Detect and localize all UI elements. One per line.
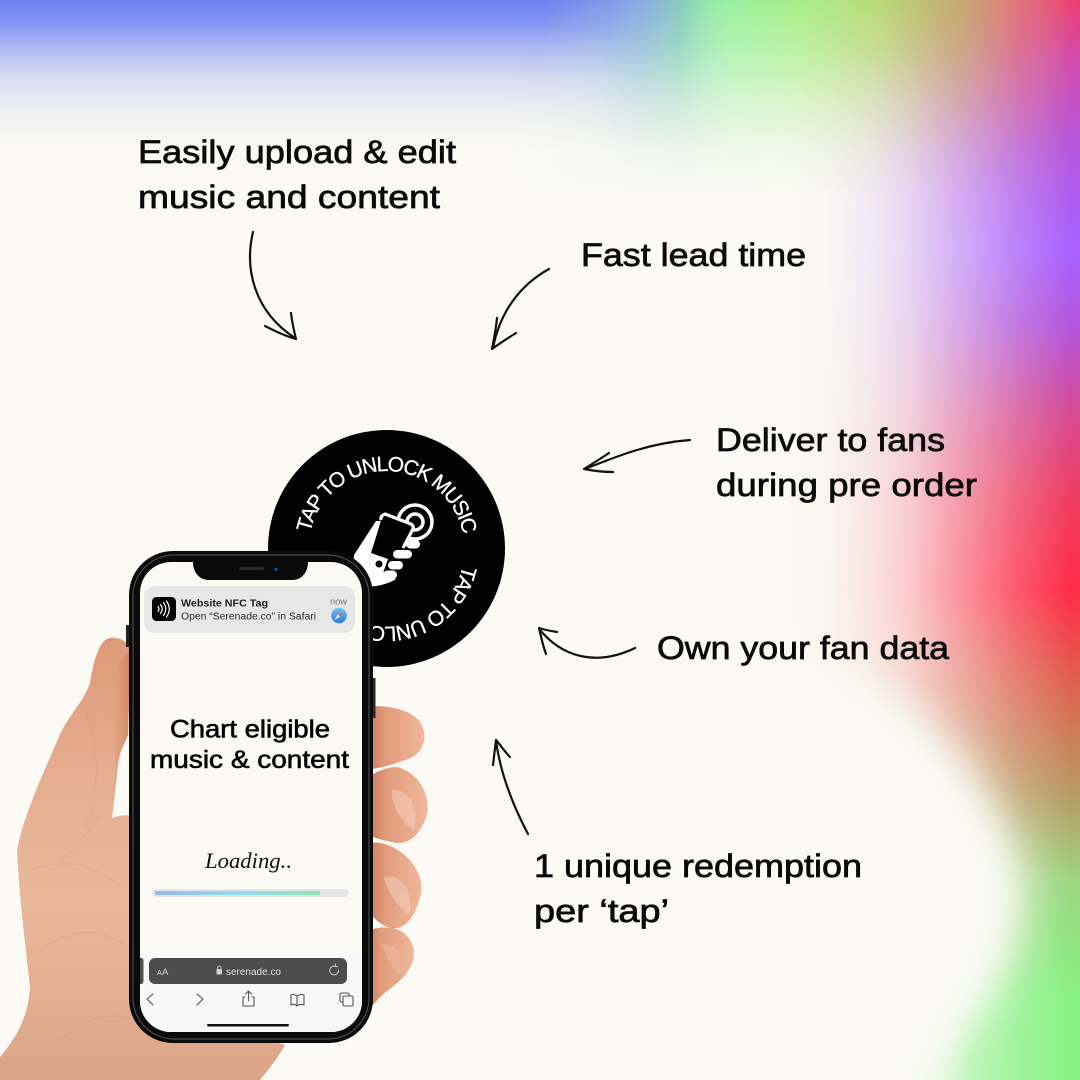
browser toolbar: [140, 952, 362, 1032]
arrow: fan data to sticker: [539, 628, 635, 658]
notification card: Open “Serenade.co” in Safari: [181, 612, 316, 622]
heading: upload and edit: [138, 134, 456, 215]
hand: palm and thumb: [0, 638, 285, 1080]
loading label: Loading..: [204, 848, 292, 873]
heading: unique redemption: 1 unique redemption: [534, 848, 862, 884]
sticker ring text: TAP TO UNLOCK MUSIC: [373, 569, 477, 642]
icon: hand tapping phone: [352, 505, 432, 586]
address pill: serenade.co: [226, 966, 281, 978]
sticker ring text: [296, 456, 477, 642]
arrow: upload to sticker: [250, 232, 296, 339]
phone: [126, 551, 376, 1043]
heading: unique redemption: per ‘tap’: [534, 893, 669, 929]
hand: index finger: [360, 706, 424, 770]
heading: fast lead time: Fast lead time: [581, 237, 806, 273]
sticker ring text: TAP TO UNLOCK MUSIC: [296, 456, 476, 534]
background gradient: right edge: [836, 0, 1080, 1080]
notification card: Website NFC Tag: [181, 598, 268, 610]
background gradient: blue top: [0, 0, 690, 121]
notification card: now: [330, 596, 348, 606]
nail: little: [382, 944, 401, 975]
address pill: AA: [157, 967, 169, 978]
arrow: lead time to sticker: [492, 269, 549, 349]
screen headline: Chart eligible: [170, 716, 330, 744]
cream wash: lower blob: [0, 620, 1023, 1080]
hand: little finger: [360, 927, 414, 1010]
NFC sticker: [268, 430, 505, 667]
phone screen: [140, 562, 362, 1032]
hand: thumb shading: [106, 650, 130, 818]
heading: upload and edit: music and content: [138, 179, 440, 215]
background gradient: green and orange top: [564, 0, 1067, 172]
toolbar icons: [147, 991, 353, 1006]
heading: own your fan data: Own your fan data: [657, 630, 949, 666]
heading: deliver to fans: during pre order: [716, 467, 977, 503]
arrow: redemption to sticker: [493, 740, 528, 834]
hand: middle finger: [360, 767, 428, 843]
icon: Safari: [331, 608, 347, 623]
notification card: [144, 586, 355, 633]
heading: deliver to fans: Deliver to fans: [716, 422, 945, 458]
progress bar: [152, 889, 349, 897]
hand: ring finger: [360, 843, 421, 928]
cream wash: bottom strip: [0, 1030, 970, 1080]
home indicator: [207, 1024, 289, 1026]
nail: middle: [392, 790, 416, 830]
screen headline: music & content: [150, 746, 349, 774]
heading: upload and edit: Easily upload & edit: [138, 134, 456, 170]
nail: ring: [384, 877, 411, 915]
icon: NFC tag: [152, 597, 176, 621]
hand: [0, 638, 428, 1080]
heading: unique redemption: [534, 848, 862, 929]
phone body: [129, 551, 373, 1043]
address pill: [149, 958, 347, 984]
hand: palm creases: [30, 710, 135, 1040]
notch: [193, 562, 308, 580]
screen headline: [150, 716, 349, 774]
arrow: deliver to sticker: [584, 440, 690, 472]
heading: deliver to fans: [716, 422, 977, 503]
